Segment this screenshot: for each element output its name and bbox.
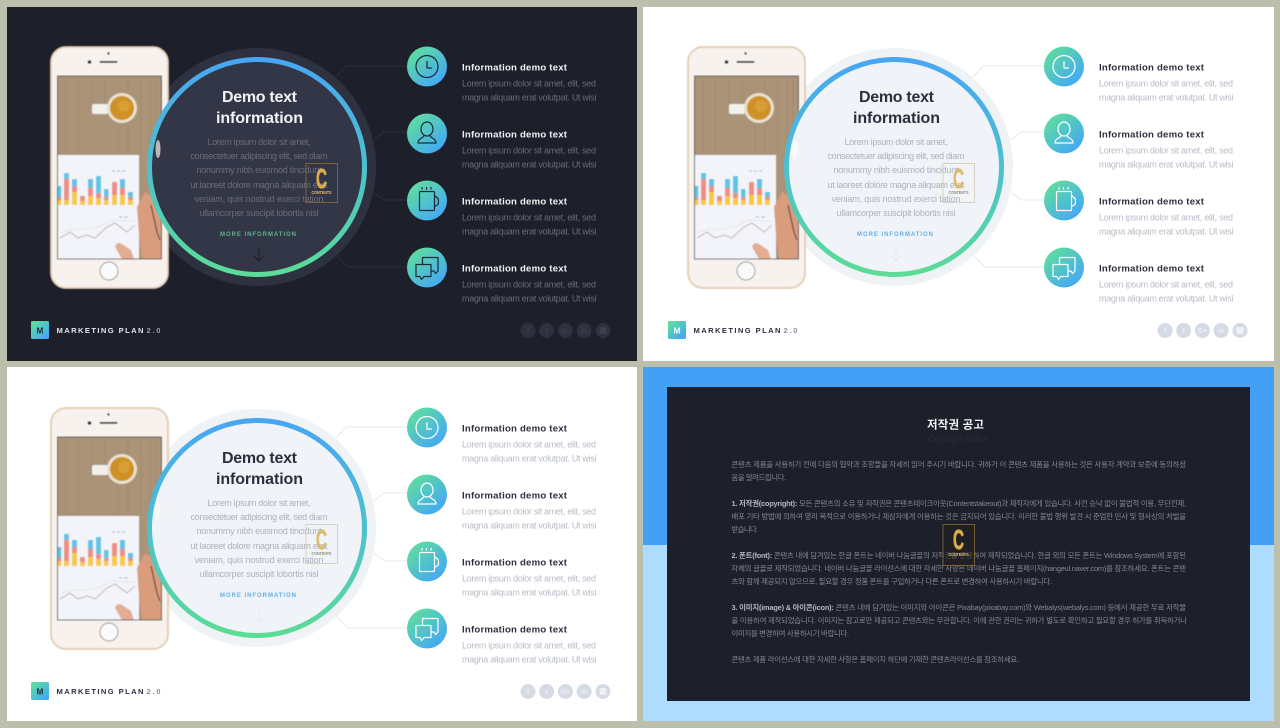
info items: magna aliquam erat volutpat. Ut wisi bbox=[462, 588, 596, 598]
social icons: G+ bbox=[561, 328, 570, 335]
circle body text: veniam, quis nostrud exerci tation bbox=[194, 194, 324, 204]
circle body text: Lorem ipsum dolor sit amet, bbox=[208, 137, 310, 147]
panel: light slide bottom left bbox=[7, 367, 637, 721]
social icons: t bbox=[546, 689, 549, 696]
watermark bbox=[306, 524, 338, 564]
circle body text: consectetuer adipiscing elit, sed diam bbox=[828, 151, 964, 161]
info items: magna aliquam erat volutpat. Ut wisi bbox=[462, 520, 596, 530]
info items: Lorem ipsum dolor sit amet, elit, sed bbox=[462, 440, 596, 450]
icon: mug bbox=[407, 180, 447, 220]
icon: chat bbox=[1044, 248, 1084, 288]
info items: magna aliquam erat volutpat. Ut wisi bbox=[462, 226, 596, 236]
info items bbox=[462, 424, 596, 664]
notice body text: 배포 기타 방법에 의하여 영리 목적으로 이용하거나 제삼자에게 이용하는 것은 금지되어 있습니다. 이러한 불법 행위 발견 시 준엄한 민사 및 형사상의 처벌을 bbox=[732, 512, 1186, 521]
brand name: 2.0 bbox=[146, 687, 160, 696]
notice body text: 음을 알려드립니다. bbox=[732, 473, 786, 482]
info items: Information demo text bbox=[462, 196, 568, 208]
info items: Lorem ipsum dolor sit amet, elit, sed bbox=[462, 280, 596, 290]
brand name: MARKETING PLAN bbox=[56, 687, 144, 696]
info items: Information demo text bbox=[462, 424, 568, 434]
heading: Demo text bbox=[859, 89, 935, 106]
info items: Lorem ipsum dolor sit amet, elit, sed bbox=[1099, 146, 1233, 156]
more information link: MORE INFORMATION bbox=[220, 593, 296, 599]
info items: Information demo text bbox=[462, 558, 568, 568]
info items: Information demo text bbox=[462, 624, 568, 636]
circle body text: nonummy nibh euismod tincidunt bbox=[196, 526, 322, 536]
info items: magna aliquam erat volutpat. Ut wisi bbox=[1099, 226, 1234, 236]
logo mark: M bbox=[37, 326, 44, 336]
brand name: 2.0 bbox=[146, 326, 160, 335]
info items: Lorem ipsum dolor sit amet, elit, sed bbox=[462, 146, 596, 156]
info items: magna aliquam erat volutpat. Ut wisi bbox=[1099, 160, 1234, 170]
connector lines bbox=[336, 66, 408, 267]
social icons: f bbox=[1164, 328, 1167, 335]
connector lines bbox=[973, 66, 1045, 267]
notice body text: 이미지를 변경하여 사용하시기 바랍니다. bbox=[732, 629, 849, 638]
social icons: t bbox=[1183, 328, 1186, 335]
social icons: f bbox=[527, 328, 530, 335]
heading line 2: information bbox=[216, 110, 303, 127]
info items: Lorem ipsum dolor sit amet, elit, sed bbox=[462, 506, 596, 516]
icon: user bbox=[407, 114, 447, 154]
circle halo bbox=[775, 48, 1013, 286]
info items: magna aliquam erat volutpat. Ut wisi bbox=[462, 92, 596, 102]
arrow down bbox=[254, 608, 264, 622]
info items: magna aliquam erat volutpat. Ut wisi bbox=[462, 160, 596, 170]
brand name: MARKETING PLAN bbox=[694, 326, 780, 335]
panel: dark slide bbox=[7, 7, 637, 361]
main circle bbox=[150, 60, 364, 274]
info items bbox=[462, 62, 596, 304]
main circle bbox=[786, 60, 1002, 274]
circle body text bbox=[190, 498, 328, 579]
phone mockup bbox=[51, 408, 168, 649]
info items: magna aliquam erat volutpat. Ut wisi bbox=[462, 454, 596, 464]
info items: Information demo text bbox=[1099, 264, 1205, 274]
circle body text: nonummy nibh euismod tincidunt bbox=[196, 165, 322, 175]
main circle bbox=[150, 420, 364, 636]
more information link: MORE INFORMATION bbox=[857, 232, 933, 238]
logo mark bbox=[31, 321, 49, 339]
social icons: t bbox=[546, 328, 549, 335]
info items: Information demo text bbox=[462, 130, 568, 140]
circle body text: ullamcorper suscipit lobortis nisl bbox=[836, 208, 956, 218]
info items bbox=[1099, 62, 1234, 304]
notice body text: 1. 저작권(copyright): 모든 콘텐츠의 소유 및 저작권은 콘텐츠테이크아웃(Contentstakeout)과 제작자에게 있습니다. 사전 승낙 없이 불법적 이용, 무단전재, bbox=[732, 499, 1186, 508]
info items: Lorem ipsum dolor sit amet, elit, sed bbox=[1099, 212, 1233, 222]
circle body text: consectetuer adipiscing elit, sed diam bbox=[190, 151, 328, 161]
circle body text: ut laoreet dolore magna aliquam erat bbox=[828, 180, 965, 190]
panel: light slide top right bbox=[643, 7, 1274, 361]
watermark: CONTENTS bbox=[312, 551, 332, 556]
notice subtitle: Copyright Notice bbox=[928, 434, 988, 444]
logo mark: M bbox=[674, 326, 681, 336]
heading: Demo text bbox=[222, 89, 298, 106]
phone mockup bbox=[688, 47, 805, 288]
watermark: CONTENTS bbox=[312, 190, 332, 195]
notice body text: 받습니다. bbox=[732, 525, 758, 534]
circle body text bbox=[190, 137, 328, 218]
info items: magna aliquam erat volutpat. Ut wisi bbox=[1099, 294, 1234, 304]
notice body text: 을 이용하여 제작되었습니다. 이미지는 참고로만 제공되고 콘텐츠와는 무관합니다. 이에 관한 권리는 귀하가 별도로 확인하고 필요할 경우 허가를 취득하거나 bbox=[732, 616, 1187, 625]
social icons: f bbox=[527, 689, 530, 696]
watermark: C bbox=[316, 163, 327, 194]
social icons: G+ bbox=[1198, 328, 1207, 335]
icon: user bbox=[1044, 114, 1084, 154]
social icons: G+ bbox=[561, 689, 570, 696]
logo mark: M bbox=[37, 688, 44, 696]
circle body text: veniam, quis nostrud exerci tation bbox=[194, 555, 324, 565]
logo mark bbox=[668, 321, 686, 339]
circle body text: ullamcorper suscipit lobortis nisl bbox=[200, 569, 318, 579]
info items: Information demo text bbox=[462, 264, 568, 274]
info items: Lorem ipsum dolor sit amet, elit, sed bbox=[462, 212, 596, 222]
watermark: CONTENTS bbox=[948, 190, 968, 195]
notice body text: 3. 이미지(image) & 아이콘(icon): 콘텐츠 내에 담겨있는 이미지와 아이콘은 Pixabay(pixabay.com)와 Webalys(webalys.com) 등에서 제공한 무료 저작물 bbox=[732, 603, 1186, 612]
heading line 2: information bbox=[216, 471, 303, 488]
notice body text: 콘텐츠 제품을 사용하기 전에 다음의 협약과 조항들을 자세히 읽어 주시기 바랍니다. 귀하가 이 콘텐츠 제품을 사용하는 것은 사용자 계약과 보증에 동의하셨 bbox=[732, 460, 1186, 469]
info items: Information demo text bbox=[462, 490, 568, 502]
info items: Lorem ipsum dolor sit amet, elit, sed bbox=[1099, 78, 1233, 88]
icon: mug bbox=[407, 542, 447, 582]
info items: Lorem ipsum dolor sit amet, elit, sed bbox=[462, 574, 596, 584]
info items: Information demo text bbox=[1099, 196, 1205, 208]
watermark: C bbox=[953, 163, 964, 194]
notice body text bbox=[732, 460, 1187, 664]
icon: chat bbox=[407, 608, 447, 648]
phone mockup bbox=[51, 47, 168, 288]
icon: clock bbox=[407, 408, 447, 448]
watermark bbox=[306, 163, 338, 202]
circle body text: Lorem ipsum dolor sit amet, bbox=[208, 498, 310, 508]
social icons bbox=[1158, 323, 1248, 338]
circle body text: ut laoreet dolore magna aliquam erat bbox=[190, 180, 328, 190]
circle body text: veniam, quis nostrud exerci tation bbox=[832, 194, 960, 204]
circle body text: Lorem ipsum dolor sit amet, bbox=[844, 137, 948, 147]
brand name: MARKETING PLAN bbox=[56, 326, 144, 335]
notice body text: 2. 폰트(font): 콘텐츠 내에 담겨있는 한글 폰트는 네이버 나눔글꼴의 저작권을 준용하여 제작되었습니다. 한글 외의 모든 폰트는 Windows System에 포함된 bbox=[732, 551, 1186, 560]
watermark: C bbox=[953, 524, 964, 555]
notice body text: 콘텐츠 제품 라이선스에 대한 자세한 사항은 홈페이지 하단에 기재한 콘텐츠라이선스를 참조하세요. bbox=[732, 655, 1019, 664]
icon: chat bbox=[407, 248, 447, 288]
circle halo bbox=[138, 48, 376, 286]
circle body text: ut laoreet dolore magna aliquam erat bbox=[190, 541, 328, 551]
circle body text bbox=[828, 137, 965, 218]
circle body text: nonummy nibh euismod tincidunt bbox=[834, 165, 959, 175]
info items: Lorem ipsum dolor sit amet, elit, sed bbox=[462, 78, 596, 88]
watermark bbox=[943, 524, 974, 566]
info items: magna aliquam erat volutpat. Ut wisi bbox=[1099, 92, 1234, 102]
watermark: CONTENTS bbox=[948, 552, 968, 557]
social icons bbox=[520, 684, 610, 699]
watermark bbox=[943, 163, 974, 202]
social icons: in bbox=[1218, 328, 1224, 335]
social icons bbox=[520, 323, 610, 338]
icon: user bbox=[407, 474, 447, 514]
notice title: 저작권 공고 bbox=[927, 418, 984, 432]
icon: mug bbox=[1044, 180, 1084, 220]
connector lines bbox=[336, 427, 408, 628]
info items: Information demo text bbox=[462, 62, 568, 74]
notice body text: 츠와 함께 제공되지 않으므로, 필요할 경우 정품 폰트를 구입하거나 다른 폰트로 변경하여 사용하시기 바랍니다. bbox=[732, 577, 1052, 586]
info items: magna aliquam erat volutpat. Ut wisi bbox=[462, 294, 596, 304]
arrow down bbox=[254, 247, 264, 261]
info items: Information demo text bbox=[1099, 62, 1205, 74]
info items: Information demo text bbox=[1099, 130, 1205, 140]
circle body text: consectetuer adipiscing elit, sed diam bbox=[190, 512, 328, 522]
info items: magna aliquam erat volutpat. Ut wisi bbox=[462, 654, 596, 664]
icon: clock bbox=[1044, 46, 1084, 86]
circle halo bbox=[138, 409, 376, 647]
heading line 2: information bbox=[853, 110, 940, 127]
social icons: in bbox=[581, 689, 587, 696]
info items: Lorem ipsum dolor sit amet, elit, sed bbox=[462, 640, 596, 650]
panel: copyright notice bbox=[643, 367, 1274, 721]
circle body text: ullamcorper suscipit lobortis nisl bbox=[200, 208, 318, 218]
social icons: in bbox=[581, 328, 587, 335]
logo mark bbox=[31, 682, 49, 700]
info items: Lorem ipsum dolor sit amet, elit, sed bbox=[1099, 280, 1233, 290]
notice body text: 자체의 글꼴로 제작되었습니다. 네이버 나눔글꼴 라이선스에 대한 자세한 사항은 네이버 나눔글꼴 홈페이지(hangeul.naver.com)를 참조하세요. 폰트는 콘텐 bbox=[732, 564, 1186, 573]
watermark: C bbox=[316, 524, 327, 555]
brand name: 2.0 bbox=[784, 326, 798, 335]
arrow down bbox=[891, 247, 901, 261]
icon: clock bbox=[407, 46, 447, 86]
heading: Demo text bbox=[222, 450, 298, 467]
more information link: MORE INFORMATION bbox=[220, 232, 296, 238]
